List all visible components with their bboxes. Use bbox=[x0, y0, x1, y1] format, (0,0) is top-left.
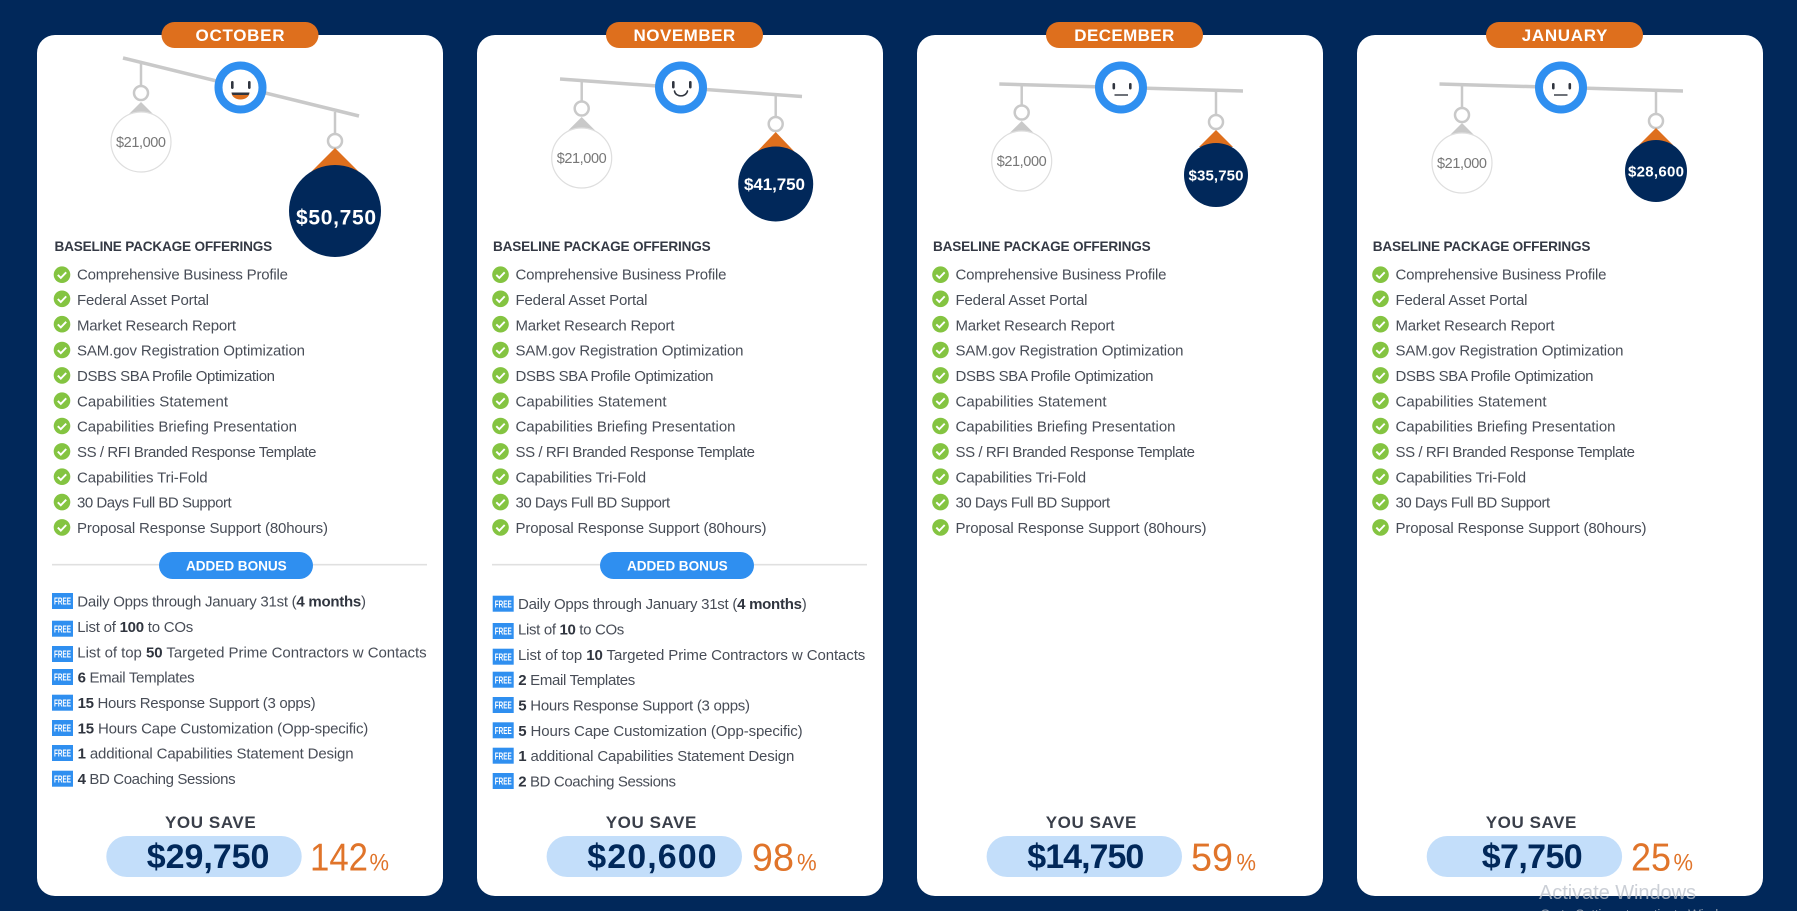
month label: November: NOVEMBER bbox=[634, 26, 735, 45]
bonus list: 4 BD Coaching Sessions bbox=[78, 771, 236, 788]
baseline checklist: DSBS SBA Profile Optimization bbox=[956, 368, 1154, 385]
balance scale: January bbox=[1432, 66, 1687, 202]
added bonus header: ADDED BONUS bbox=[627, 558, 728, 574]
savings: December: $14,750 bbox=[1027, 838, 1144, 876]
savings: October: YOU SAVE bbox=[165, 813, 256, 832]
baseline checklist bbox=[54, 266, 328, 537]
month label: November bbox=[606, 22, 763, 48]
baseline checklist: DSBS SBA Profile Optimization bbox=[1396, 368, 1594, 385]
savings: October: % bbox=[370, 850, 389, 877]
bonus list: List of 10 to COs bbox=[518, 622, 624, 638]
baseline checklist bbox=[492, 266, 766, 537]
card background bbox=[1357, 35, 1763, 896]
added bonus header bbox=[52, 552, 427, 579]
card background bbox=[477, 35, 883, 896]
watermark: Activate Windows: Activate Windows bbox=[1539, 882, 1696, 904]
baseline checklist: SS / RFI Branded Response Template bbox=[1396, 444, 1635, 461]
balance scale: October: $50,750 bbox=[296, 206, 376, 230]
added bonus header bbox=[492, 552, 867, 579]
bonus list: 6 Email Templates bbox=[78, 670, 195, 686]
savings: December bbox=[987, 813, 1256, 880]
month label: January: JANUARY bbox=[1522, 26, 1608, 45]
balance scale: November: $41,750 bbox=[744, 175, 805, 194]
baseline checklist: SS / RFI Branded Response Template bbox=[516, 444, 755, 461]
baseline checklist: Proposal Response Support (80hours) bbox=[516, 520, 766, 537]
balance scale: November: $21,000 bbox=[557, 151, 607, 167]
baseline checklist: Federal Asset Portal bbox=[516, 292, 648, 309]
baseline checklist: Proposal Response Support (80hours) bbox=[1396, 520, 1646, 537]
baseline checklist: Capabilities Tri-Fold bbox=[516, 469, 646, 486]
baseline checklist: Federal Asset Portal bbox=[77, 292, 209, 309]
bonus list: 2 BD Coaching Sessions bbox=[518, 774, 676, 790]
bonus list: FREE bbox=[54, 672, 71, 684]
baseline checklist: Market Research Report bbox=[956, 317, 1115, 334]
savings: October: $29,750 bbox=[147, 838, 269, 876]
bonus list: FREE bbox=[54, 773, 71, 785]
bonus list: FREE bbox=[495, 674, 512, 686]
savings: October bbox=[106, 813, 389, 880]
bonus list: FREE bbox=[495, 598, 512, 610]
month label: December: DECEMBER bbox=[1074, 26, 1174, 45]
baseline checklist: DSBS SBA Profile Optimization bbox=[516, 368, 714, 385]
bonus list: List of top 50 Targeted Prime Contractors w Contacts bbox=[77, 644, 427, 662]
bonus list: List of top 10 Targeted Prime Contractors w Contacts bbox=[518, 647, 865, 664]
balance scale: October bbox=[111, 58, 381, 257]
baseline checklist: 30 Days Full BD Support bbox=[1396, 495, 1551, 512]
bonus list: Daily Opps through January 31st (4 months) bbox=[77, 594, 366, 610]
savings: November: % bbox=[797, 850, 817, 877]
bonus list: List of 100 to COs bbox=[77, 619, 193, 636]
savings: October: 142 bbox=[310, 837, 368, 880]
baseline checklist: Federal Asset Portal bbox=[1396, 292, 1528, 309]
baseline checklist: Capabilities Briefing Presentation bbox=[956, 419, 1176, 436]
baseline checklist: DSBS SBA Profile Optimization bbox=[77, 368, 275, 385]
baseline checklist: 30 Days Full BD Support bbox=[77, 495, 233, 512]
baseline checklist: SS / RFI Branded Response Template bbox=[77, 444, 316, 461]
savings: November: $20,600 bbox=[587, 838, 717, 876]
savings: January: 25 bbox=[1631, 837, 1671, 880]
bonus list: 5 Hours Cape Customization (Opp-specific) bbox=[518, 723, 803, 740]
savings: November bbox=[547, 813, 817, 880]
bonus list: 1 additional Capabilities Statement Design bbox=[518, 748, 794, 765]
savings: December: % bbox=[1236, 850, 1256, 877]
heading: baseline offerings: BASELINE PACKAGE OFFERINGS bbox=[493, 239, 711, 254]
baseline checklist bbox=[1372, 266, 1646, 537]
card background bbox=[37, 35, 443, 896]
added bonus header: ADDED BONUS bbox=[186, 558, 287, 574]
bonus list: 2 Email Templates bbox=[518, 672, 635, 689]
bonus list: FREE bbox=[54, 649, 71, 661]
baseline checklist: Comprehensive Business Profile bbox=[516, 266, 726, 284]
baseline checklist: SS / RFI Branded Response Template bbox=[956, 444, 1195, 461]
baseline checklist: Capabilities Statement bbox=[77, 393, 229, 410]
baseline checklist: Market Research Report bbox=[516, 317, 675, 334]
savings: January: $7,750 bbox=[1482, 838, 1583, 876]
bonus list: FREE bbox=[495, 700, 512, 712]
baseline checklist: Proposal Response Support (80hours) bbox=[77, 520, 328, 537]
baseline checklist bbox=[932, 266, 1206, 537]
balance scale: November bbox=[552, 66, 813, 222]
heading: baseline offerings: BASELINE PACKAGE OFFERINGS bbox=[1373, 239, 1590, 254]
savings: January: % bbox=[1674, 850, 1693, 877]
baseline checklist: Capabilities Briefing Presentation bbox=[77, 419, 297, 436]
watermark: Activate Windows bbox=[1539, 882, 1745, 911]
heading: baseline offerings: BASELINE PACKAGE OFFERINGS bbox=[933, 239, 1151, 254]
bonus list: FREE bbox=[495, 725, 512, 737]
bonus list: FREE bbox=[54, 723, 71, 735]
baseline checklist: Capabilities Briefing Presentation bbox=[516, 419, 736, 436]
baseline checklist: Comprehensive Business Profile bbox=[1396, 266, 1606, 284]
month label: October: OCTOBER bbox=[196, 26, 284, 45]
baseline checklist: Comprehensive Business Profile bbox=[956, 266, 1166, 284]
bonus list: 5 Hours Response Support (3 opps) bbox=[518, 698, 750, 714]
bonus list bbox=[52, 593, 427, 788]
bonus list: FREE bbox=[54, 748, 71, 760]
baseline checklist: Capabilities Statement bbox=[1396, 393, 1547, 410]
panel: December bbox=[917, 22, 1323, 896]
month label: October bbox=[162, 22, 318, 48]
savings: December: YOU SAVE bbox=[1046, 813, 1136, 832]
baseline checklist: Capabilities Briefing Presentation bbox=[1396, 419, 1616, 436]
month label: January bbox=[1486, 22, 1643, 48]
bonus list: 1 additional Capabilities Statement Design bbox=[78, 746, 354, 762]
balance scale: October: $21,000 bbox=[116, 135, 166, 151]
panel: January bbox=[1357, 22, 1763, 896]
baseline checklist: Capabilities Tri-Fold bbox=[956, 469, 1086, 486]
panel: October bbox=[37, 22, 443, 896]
bonus list: 15 Hours Response Support (3 opps) bbox=[78, 695, 316, 712]
bonus list: FREE bbox=[54, 623, 71, 635]
baseline checklist: Capabilities Statement bbox=[516, 393, 667, 410]
savings: January bbox=[1427, 813, 1693, 880]
heading: baseline offerings: BASELINE PACKAGE OFFERINGS bbox=[54, 239, 272, 254]
bonus list: Daily Opps through January 31st (4 months) bbox=[518, 596, 807, 613]
card background bbox=[917, 35, 1323, 896]
balance scale: December bbox=[992, 66, 1248, 207]
bonus list: FREE bbox=[495, 776, 512, 788]
bonus list: FREE bbox=[495, 750, 512, 762]
baseline checklist: Market Research Report bbox=[77, 317, 237, 334]
savings: November: 98 bbox=[752, 837, 794, 880]
panel: November bbox=[477, 22, 883, 896]
baseline checklist: SAM.gov Registration Optimization bbox=[77, 343, 305, 360]
balance scale: December: $21,000 bbox=[997, 154, 1047, 170]
baseline checklist: Capabilities Tri-Fold bbox=[1396, 469, 1526, 486]
balance scale: December: $35,750 bbox=[1188, 168, 1244, 184]
baseline checklist: SAM.gov Registration Optimization bbox=[516, 343, 744, 360]
baseline checklist: SAM.gov Registration Optimization bbox=[1396, 343, 1624, 360]
bonus list: FREE bbox=[54, 596, 71, 608]
baseline checklist: Capabilities Statement bbox=[956, 393, 1107, 410]
savings: December: 59 bbox=[1191, 837, 1233, 880]
balance scale: January: $21,000 bbox=[1437, 156, 1487, 172]
bonus list: FREE bbox=[495, 651, 512, 663]
baseline checklist: 30 Days Full BD Support bbox=[956, 495, 1111, 512]
month label: December bbox=[1046, 22, 1203, 48]
baseline checklist: Comprehensive Business Profile bbox=[77, 266, 288, 284]
baseline checklist: 30 Days Full BD Support bbox=[516, 495, 671, 512]
savings: January: YOU SAVE bbox=[1486, 813, 1576, 832]
savings: November: YOU SAVE bbox=[606, 813, 696, 832]
baseline checklist: SAM.gov Registration Optimization bbox=[956, 343, 1184, 360]
baseline checklist: Market Research Report bbox=[1396, 317, 1555, 334]
bonus list: FREE bbox=[495, 626, 512, 638]
bonus list: FREE bbox=[54, 697, 71, 709]
baseline checklist: Proposal Response Support (80hours) bbox=[956, 520, 1206, 537]
bonus list: 15 Hours Cape Customization (Opp-specific) bbox=[78, 720, 368, 738]
balance scale: January: $28,600 bbox=[1628, 164, 1684, 180]
baseline checklist: Capabilities Tri-Fold bbox=[77, 469, 208, 486]
bonus list bbox=[493, 596, 865, 790]
baseline checklist: Federal Asset Portal bbox=[956, 292, 1088, 309]
